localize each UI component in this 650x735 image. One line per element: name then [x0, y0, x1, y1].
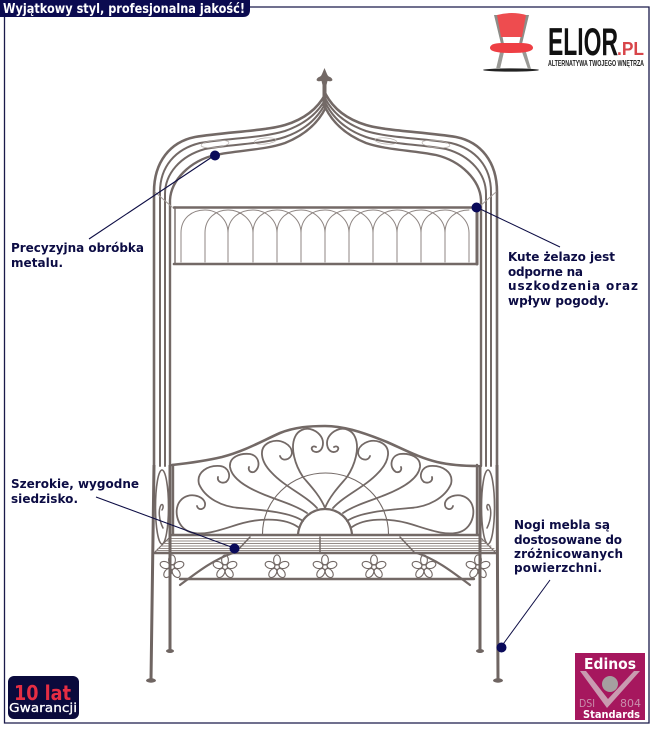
title banner: Wyjątkowy styl, profesjonalna jakość! — [3, 2, 245, 17]
callout: metal finish: metalu. — [11, 256, 63, 270]
backrest — [155, 426, 495, 585]
badge: Edinos standards: Standards — [583, 708, 640, 721]
callout: seat: siedzisko. — [11, 492, 78, 506]
callout: metal finish — [11, 150, 220, 270]
callout: legs: Nogi mebla są — [514, 518, 610, 532]
callout: wrought iron: uszkodzenia oraz — [508, 279, 638, 293]
callout: wrought iron: Kute żelazo jest — [508, 250, 615, 264]
arch — [154, 68, 497, 466]
large half circle — [262, 473, 388, 534]
callout: legs: powierzchni. — [514, 561, 602, 575]
badge: Edinos standards: DSI — [579, 697, 595, 710]
badge: Edinos standards: 804 — [620, 697, 641, 710]
logo: Elior.pl — [483, 13, 644, 72]
badge: 10 years warranty — [8, 676, 79, 719]
upper lattice panel — [174, 207, 477, 264]
callout: legs — [496, 518, 623, 652]
badge: 10 years warranty: 10 lat — [14, 681, 71, 705]
logo suffix: .PL — [617, 39, 644, 59]
sunburst — [298, 509, 352, 534]
legs — [146, 465, 503, 683]
flower ornaments — [159, 555, 491, 579]
garden bench with arch — [146, 68, 503, 683]
callout: legs: zróżnicowanych — [514, 547, 623, 561]
seat — [155, 535, 497, 579]
callout: seat — [11, 477, 240, 554]
callout: legs: dostosowane do — [514, 533, 622, 547]
finial — [316, 68, 332, 108]
badge: 10 years warranty: Gwarancji — [9, 701, 77, 715]
badge: Edinos standards: Edinos — [584, 655, 636, 673]
callout: wrought iron — [472, 202, 638, 308]
callout: metal finish: Precyzyjna obróbka — [11, 241, 144, 255]
badge: Edinos standards — [575, 653, 645, 721]
callout: wrought iron: wpływ pogody. — [508, 294, 609, 308]
icon: red chair — [483, 13, 539, 72]
callout: wrought iron: odporne na — [508, 265, 583, 279]
callout: seat: Szerokie, wygodne — [11, 477, 139, 491]
